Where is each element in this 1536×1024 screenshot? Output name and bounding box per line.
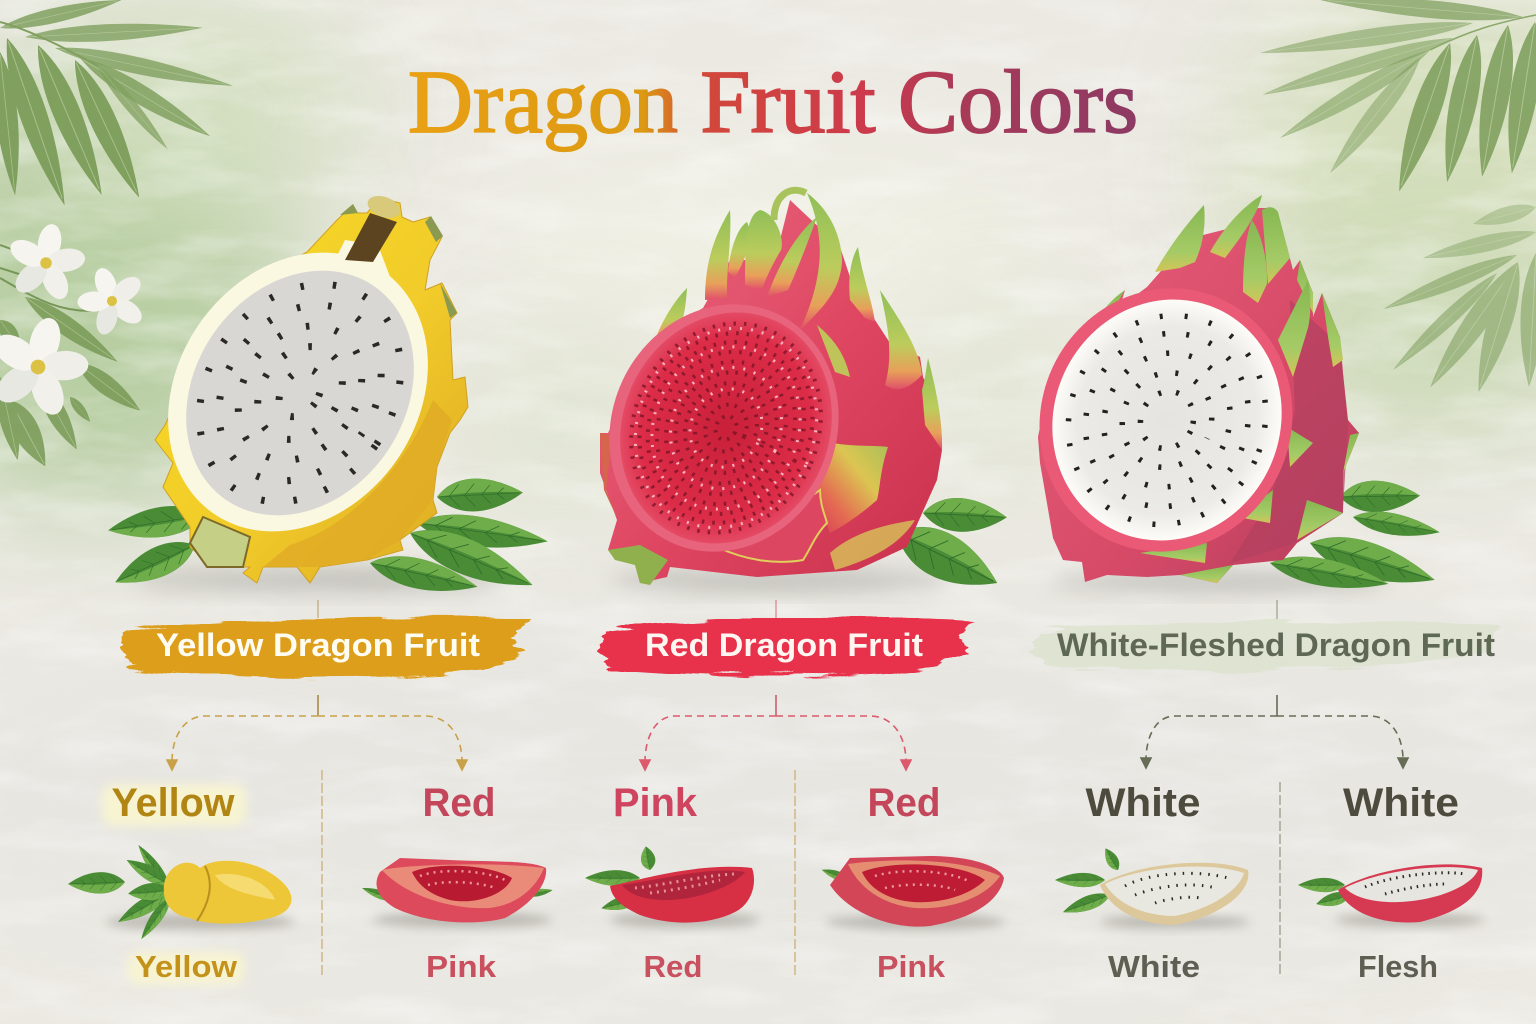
flowers [0,217,157,428]
headings: flesh colors [112,781,1459,825]
captions: skin colors: Flesh [1358,949,1438,984]
palm frond top right [1259,0,1536,196]
spike tips [340,204,457,318]
captions: skin colors [135,949,1438,984]
dark right skin [1230,300,1348,563]
red dragon fruit [569,190,1008,603]
headings: flesh colors: Red [868,781,940,825]
palm frond lower left [0,245,146,472]
darker lower skin [263,400,452,567]
connector stubs above labels [318,600,1277,620]
small fruit: pink with red flesh [585,845,760,928]
title: Dragon Fruit Colors [408,53,1138,152]
yellow highlights [102,784,246,984]
white-fleshed dragon fruit [997,195,1442,597]
palm frond top left [0,0,235,210]
captions: skin colors: Yellow [135,949,238,984]
small fruit: red with pink flesh [361,858,553,928]
headings: flesh colors: Yellow [112,781,235,825]
headings: flesh colors: Red [422,781,496,825]
headings: flesh colors: White [1086,781,1200,825]
label: yellow dragon fruit: Yellow Dragon Fruit [156,627,480,663]
label: yellow dragon fruit [122,618,528,678]
label: white-fleshed dragon fruit: White-Fleshed Dragon Fruit [1057,627,1495,663]
arrows: yellow [167,695,467,770]
front petals [813,443,888,533]
crown spikes [1087,195,1359,583]
headings: flesh colors: Pink [613,781,698,825]
palm frond mid right [1380,199,1536,396]
yellow dragon fruit [106,192,550,601]
small fruit: red with pink flesh second [820,856,1005,930]
column dividers [322,770,1280,975]
captions: skin colors: Pink [426,949,497,984]
arrows: white [1141,695,1408,768]
label: red dragon fruit [600,617,972,676]
captions: skin colors: Pink [877,949,946,984]
arrows: red [640,695,911,770]
headings: flesh colors: White [1343,781,1459,825]
label: red dragon fruit: Red Dragon Fruit [645,627,923,663]
captions: skin colors: White [1108,949,1200,984]
small fruit: white with red skin [1298,864,1485,927]
small fruit: yellow [68,842,295,942]
label: white-fleshed dragon fruit [1030,622,1498,671]
small fruit: white with white skin [1055,845,1250,929]
crown spikes [653,193,942,450]
captions: skin colors: Red [644,949,702,984]
